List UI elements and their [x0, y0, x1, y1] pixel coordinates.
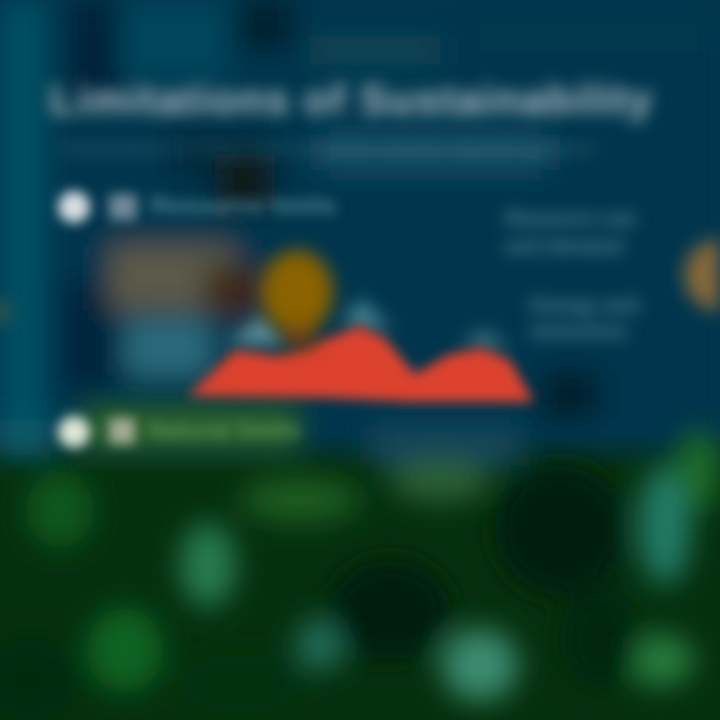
illustration: red mountains with teal peaks and amber balloon: [188, 250, 534, 402]
heading text: upper section: Resource limits: [150, 192, 336, 220]
mountain peaks: [225, 298, 510, 350]
red mountains: [188, 326, 534, 402]
body text block: upper right: and demand: [505, 236, 623, 258]
body text block: upper right: [500, 204, 639, 260]
body text block: upper right: Resource use: [505, 208, 636, 230]
subtitle: Constraints on long-term progress across natural systems: [60, 138, 595, 160]
heading text: lower section: Natural limits: [148, 417, 300, 444]
body text block: lower right: Energy and: [530, 295, 639, 317]
body text block: lower right: [525, 292, 644, 345]
icon: upper bullet: [58, 191, 90, 223]
number: upper section: [109, 194, 137, 220]
foliage highlights: [0, 405, 720, 720]
sky: [0, 0, 720, 470]
amber balloon: [261, 250, 333, 350]
title: Limitations of Sustainability: [50, 76, 654, 123]
body text block: lower right: emissions: [530, 321, 628, 343]
section heading: upper with bullet icon: [49, 182, 339, 232]
section heading: lower with bullet icon: [49, 407, 302, 457]
number: lower section: [109, 418, 135, 444]
icon: left-edge faint marker: [0, 300, 12, 324]
icon: lower bullet: [58, 416, 90, 448]
icon: right-edge amber sun: [684, 239, 720, 311]
